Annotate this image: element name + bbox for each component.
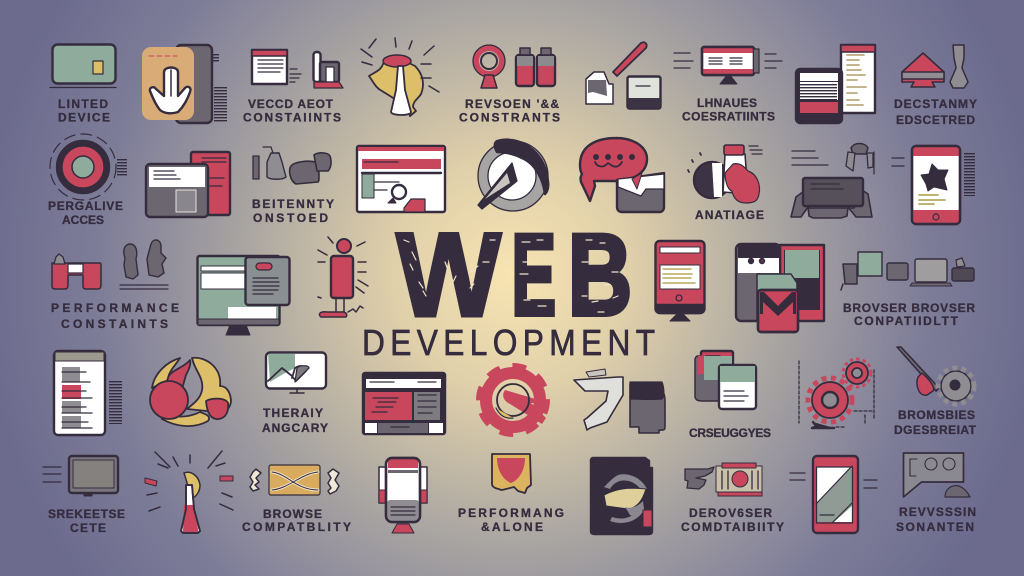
label: browser compatibility: CONPATIIDLTT — [854, 314, 959, 328]
label: revision constraints: REVSOEN '&& — [465, 97, 559, 111]
icon: red gear — [481, 368, 549, 432]
label: performance alone: PERFORMANG — [458, 506, 564, 520]
label: screens cete — [48, 507, 125, 535]
icon: limited device tablet — [50, 44, 116, 88]
icon: performance printer and figures — [52, 240, 168, 289]
label: performance alone — [458, 506, 564, 534]
icon: webcam and bottles — [473, 45, 555, 88]
label: performance alone: &ALONE — [481, 520, 543, 534]
label: browser design: BROMSBIES — [898, 408, 975, 422]
label: resources: CRSEUGGYES — [689, 426, 771, 440]
label: limited device — [58, 97, 110, 124]
label: perceptive access: ACCES — [62, 213, 104, 227]
label: developer compatibility: COMDTAIBIITY — [681, 520, 784, 534]
label: description: DECSTANMY — [894, 97, 977, 111]
icon: console device — [791, 144, 874, 218]
label: identity onstoed — [252, 197, 334, 225]
icon: folded pipe and dark device — [574, 369, 665, 433]
label: therapy ancillary: THERAIY — [263, 406, 323, 420]
label: languages constraints: COESRATIINTS — [682, 110, 775, 124]
label: vector constraints: VECCD AEOT — [248, 97, 334, 111]
label: limited device: LINTED — [58, 97, 108, 111]
icon: overlapping devices with envelope — [736, 244, 824, 332]
icon: red phone with diagonal screen — [790, 456, 877, 533]
label: browser design: DGESBREIAT — [894, 423, 977, 437]
label: revision sonanten — [896, 505, 976, 534]
label: advantage: ANATIAGE — [695, 208, 764, 222]
label: browser compatibility: BROWSE — [263, 507, 322, 521]
label: vector constraints — [243, 97, 341, 124]
icon: tangled knot — [150, 358, 231, 426]
icon: phone on stand — [379, 458, 427, 533]
icon: developer device cluster — [685, 463, 762, 496]
icon: phone with star — [892, 146, 975, 224]
icon: lamp with rays — [361, 38, 439, 116]
icon: shield badge — [492, 454, 531, 493]
icon: globe, document and bear — [688, 145, 762, 203]
icon: connected gears — [799, 359, 874, 428]
icon: browser device group — [841, 252, 974, 290]
icon: chat bubble and envelope — [580, 138, 664, 212]
label: revision sonanten: REVVSSSIN — [899, 505, 976, 519]
label: browser compatibility — [843, 301, 975, 328]
label: performance constraints: CONSTAINTS — [61, 317, 168, 331]
title: DEVELOPMENT: DEVELOPMENT — [362, 323, 655, 363]
title: WEB: W — [396, 207, 502, 342]
label: browser compatibility — [242, 507, 351, 534]
label: performance constraints — [51, 301, 179, 331]
label: revision constraints: CONSTRANTS — [459, 110, 560, 124]
icon: tablet and document — [796, 45, 875, 123]
icon: brush and grey gear — [897, 347, 974, 404]
label: performance constraints: PERFORMANCE — [51, 301, 179, 315]
label: revision sonanten: SONANTEN — [896, 520, 974, 534]
icon: gadget cluster — [253, 147, 331, 184]
label: browser design — [894, 408, 977, 437]
label: browser compatibility: BROVSER BROVSER — [843, 301, 975, 315]
icon: red figure with rays — [318, 237, 368, 317]
label: screens cete: SREKEETSE — [48, 507, 125, 521]
icon: dark refresh panel — [591, 458, 652, 534]
icon: red phone — [656, 241, 704, 321]
label: therapy ancillary: ANGCARY — [262, 421, 328, 435]
icon: web layout window — [363, 373, 445, 434]
label: perceptive access: PERGALIVE — [48, 199, 123, 213]
icon: pyramid and spatula — [902, 45, 968, 88]
icon: browser window and bottle — [252, 50, 343, 88]
label: screens cete: CETE — [70, 521, 106, 535]
label: limited device: DEVICE — [58, 110, 110, 124]
label: identity onstoed: ONSTOED — [253, 211, 328, 225]
label: languages constraints — [682, 96, 775, 124]
icon: monitor with lines — [674, 47, 782, 84]
label: languages constraints: LHNAUES — [697, 96, 757, 110]
icon: marker, shirt and tablet — [586, 42, 660, 108]
title: WEB: B — [568, 210, 632, 339]
label: description — [894, 97, 977, 127]
icon: tablet with red document — [146, 152, 230, 217]
icon: stacked documents — [695, 351, 756, 409]
icon: browser window — [357, 146, 445, 212]
icon: clock with play wedge — [478, 140, 548, 211]
label: description: EDSCETRED — [896, 113, 975, 127]
icon: document list phone — [54, 351, 122, 435]
icon: circular target — [50, 134, 127, 200]
label: perceptive access — [48, 199, 123, 227]
label: browser compatibility: COMPATBLITY — [242, 520, 351, 534]
label: therapy ancillary — [262, 406, 328, 435]
icon: tube with rays — [145, 451, 233, 533]
label: developer compatibility: DEROV6SER — [689, 506, 772, 520]
icon: image monitor — [266, 352, 326, 393]
icon: grey tablet — [43, 456, 118, 496]
icon: crossed bands — [250, 465, 339, 495]
title: WEB: E — [512, 211, 556, 339]
icon: desktop monitor with card — [198, 256, 290, 335]
label: vector constraints: CONSTAIINTS — [243, 110, 341, 124]
icon: hand on phone — [142, 45, 227, 123]
label: developer compatibility — [681, 506, 784, 534]
title: WEB — [396, 207, 632, 342]
label: identity onstoed: BEITENNTY — [252, 197, 334, 211]
label: revision constraints — [459, 97, 560, 124]
icon: speech panel with symbols — [904, 453, 970, 497]
